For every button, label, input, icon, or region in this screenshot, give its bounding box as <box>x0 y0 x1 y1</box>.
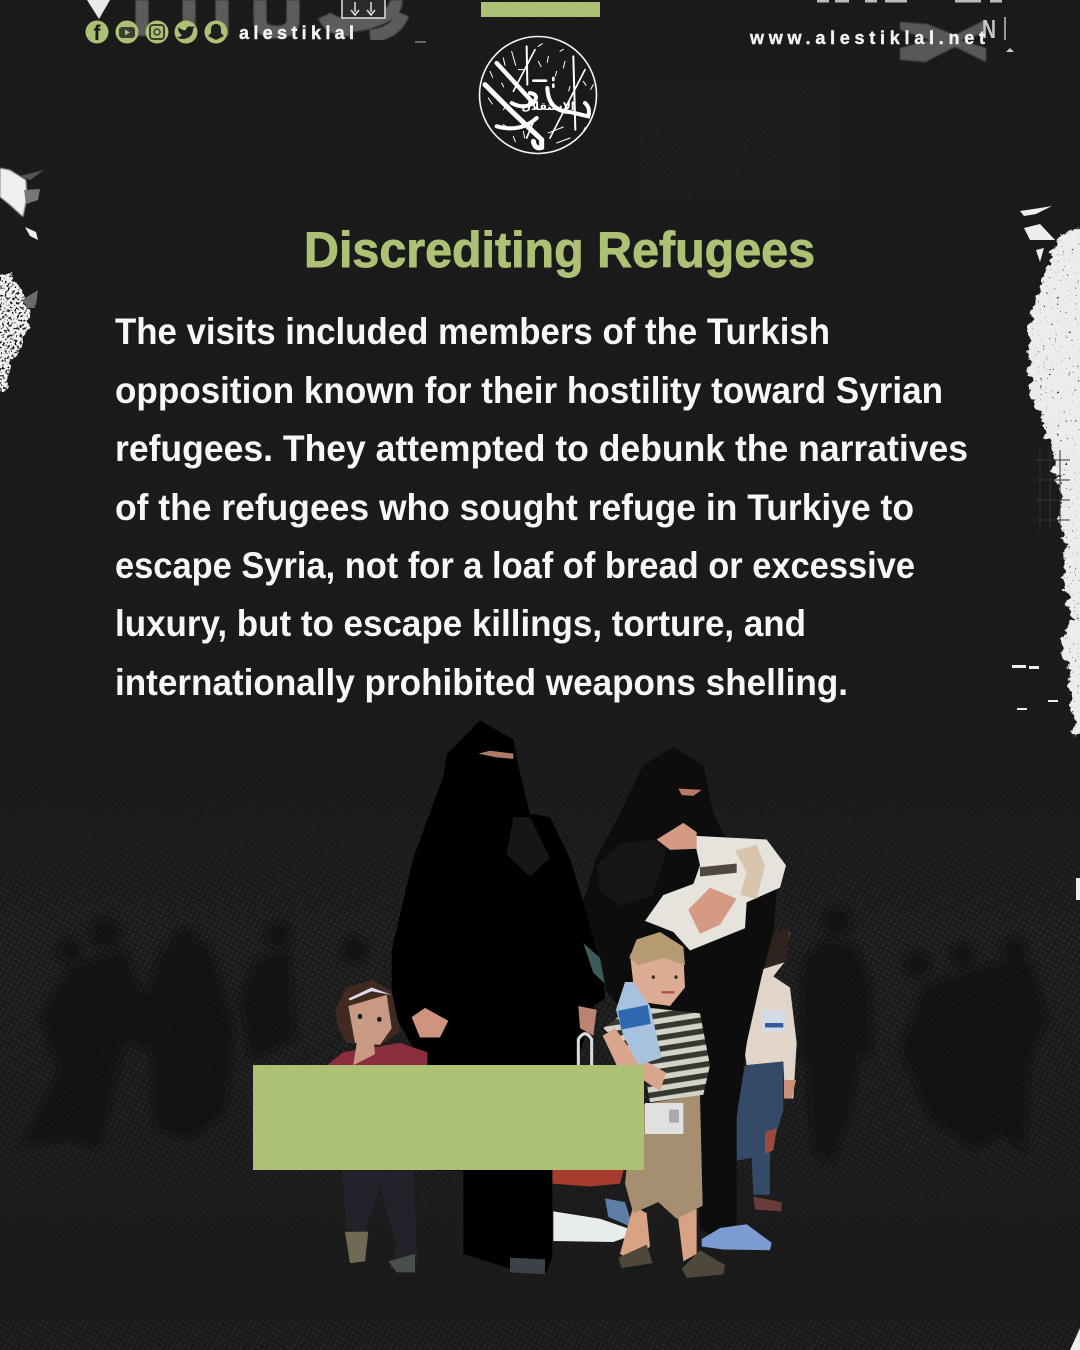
social icons <box>86 20 228 45</box>
website address: www.alestiklal.net <box>749 28 985 48</box>
brand name: alestiklal <box>239 23 354 43</box>
body text: luxury, but to escape killings, torture, and <box>115 602 806 644</box>
body text: The visits included members of the Turkish <box>115 310 830 352</box>
woman's hands <box>657 823 737 934</box>
icon: youtube <box>116 20 138 44</box>
torn paper edge: left <box>0 168 44 392</box>
hand holding child and bag handle <box>412 1006 597 1065</box>
body text: opposition known for their hostility toward Syrian <box>115 369 943 411</box>
crowd silhouettes: left <box>20 918 368 1150</box>
woman on the right <box>583 747 777 1250</box>
body text: of the refugees who sought refuge in Turkiye to <box>115 486 914 528</box>
body text: internationally prohibited weapons shelling. <box>115 661 848 703</box>
logo: calligraphy seal: الاستقلال <box>521 100 575 113</box>
refugee family photo cut-out <box>327 720 797 1278</box>
icon: facebook <box>86 20 108 45</box>
torn paper edge: right <box>1012 206 1080 1350</box>
icon: facebook: f <box>94 22 102 45</box>
girl at left <box>327 980 427 1272</box>
green blank rectangle <box>253 1065 644 1170</box>
boy holding water bottle <box>603 932 725 1278</box>
logo: calligraphy seal <box>480 36 596 154</box>
body text: refugees. They attempted to debunk the narratives <box>115 427 968 469</box>
top decorative lettering <box>87 0 426 43</box>
baby wrapped in white cloth <box>645 836 786 950</box>
crowd silhouettes: right <box>800 906 1048 1165</box>
icon: snapchat <box>204 20 228 44</box>
woman on the left <box>392 720 605 1274</box>
icon: instagram <box>146 20 168 44</box>
body text <box>115 310 968 703</box>
top accent bar <box>481 2 600 17</box>
body text: escape Syria, not for a loaf of bread or excessive <box>115 544 915 586</box>
icon: twitter <box>174 20 198 44</box>
title: Discrediting Refugees <box>304 222 815 278</box>
child at right <box>733 928 797 1211</box>
red and blue belongings <box>552 1169 633 1242</box>
top right decorative marks <box>817 1 1014 62</box>
top right decorative marks: N <box>982 14 996 44</box>
